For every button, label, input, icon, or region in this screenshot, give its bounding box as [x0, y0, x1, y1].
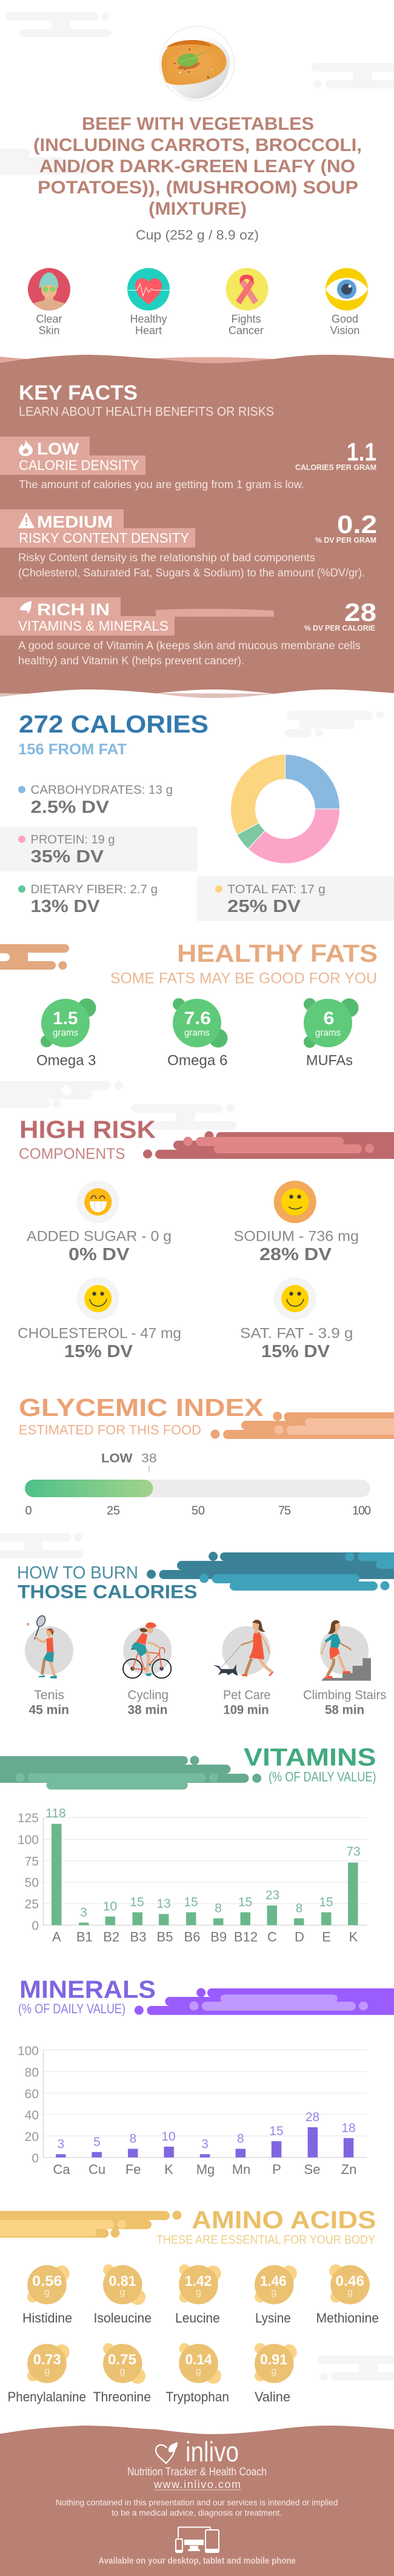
benefit label: fights cancer [229, 313, 264, 337]
label: climbing stairs: Climbing Stairs [303, 1688, 387, 1702]
fact: medium risky content density: MEDIUM [37, 512, 113, 531]
background cloud near amino acids [318, 2355, 394, 2381]
amino badge: phenylalanine: Phenylalanine [7, 2389, 86, 2404]
amino badge: phenylalanine: g [44, 2366, 50, 2376]
background cloud top left [6, 12, 112, 37]
fact: medium risky content density [0, 509, 377, 579]
fact: low calorie density: The amount of calories you are getting from 1 gram is low. [19, 478, 304, 491]
icon: warning triangle [18, 512, 35, 528]
benefit label: fights cancer: Cancer [229, 324, 264, 337]
section: amino acids [0, 2206, 379, 2404]
amino badge: leucine: Leucine [175, 2310, 220, 2326]
background cloud above burn section [0, 1533, 84, 1558]
fact: rich in vitamins and minerals: RICH IN [37, 600, 110, 619]
bar chart: minerals: 18 [341, 2121, 356, 2135]
icon: flame [19, 440, 33, 456]
logo: inlivo: inlivo [185, 2436, 239, 2467]
bar chart: vitamins: 10 [103, 1899, 117, 1914]
subheading: key facts: LEARN ABOUT HEALTH BENEFITS OR RISKS [19, 405, 274, 418]
amino badge: histidine [22, 2265, 72, 2326]
gauge scale: 0 [25, 1504, 32, 1517]
bar chart: vitamins: 25 [25, 1897, 39, 1911]
badge: omega 3 [36, 998, 96, 1068]
bar chart: minerals: Ca [53, 2162, 70, 2177]
amino badge: valine: g [272, 2366, 276, 2376]
risk item: sodium: 28% DV [259, 1245, 332, 1264]
fact: rich in vitamins and minerals: % DV PER CALORIE [304, 623, 375, 632]
bar chart: minerals: 5 [93, 2135, 101, 2149]
decorative band: high risk [143, 1132, 394, 1159]
bar chart: vitamins: B3 [130, 1930, 146, 1944]
heading: calories: 272 CALORIES [19, 710, 209, 738]
subheading: components: COMPONENTS [19, 1145, 125, 1162]
bar chart: minerals [18, 2044, 367, 2177]
section: vitamins [0, 1743, 376, 1944]
label: pet care [223, 1688, 270, 1717]
badge: omega 3: grams [53, 1028, 78, 1038]
title: BEEF WITH VEGETABLES [82, 114, 314, 134]
disclaimer [56, 2497, 338, 2518]
risk item: added sugar: ADDED SUGAR - 0 g [27, 1229, 172, 1244]
bar chart: vitamins: 8 [296, 1902, 302, 1915]
heading: how to burn: HOW TO BURN [17, 1563, 138, 1583]
legend: total fat [197, 876, 394, 921]
bar chart: minerals: 40 [25, 2108, 39, 2122]
availability note: Available on your desktop, tablet and mobile phone [98, 2557, 296, 2566]
bar chart: vitamins: 23 [265, 1888, 279, 1902]
fact: medium risky content density: (Cholesterol, Saturated Fat, Sugars & Sodium) to the amount (%DV/gr). [18, 566, 365, 579]
fact: low calorie density: LOW [37, 439, 79, 458]
benefit label: clear skin: Skin [38, 324, 60, 337]
legend: carbohydrates: CARBOHYDRATES: 13 g [30, 783, 173, 797]
gauge marker: low 38: LOW [101, 1452, 133, 1465]
gauge marker: low 38 [101, 1452, 157, 1472]
risk item: added sugar: 0% DV [68, 1245, 130, 1264]
amino badge: methionine [316, 2264, 379, 2326]
amino badge: tryptophan: 0.14 [185, 2352, 212, 2368]
fact: rich in vitamins and minerals [0, 597, 376, 667]
bar chart: minerals: Mn [232, 2162, 250, 2177]
risk item: saturated fat: 15% DV [261, 1342, 330, 1361]
benefit label: healthy heart [130, 313, 167, 337]
fact: medium risky content density: Risky Content density is the relationship of bad components [18, 552, 315, 564]
benefit label: good vision: Good [332, 313, 358, 325]
amino badge: lysine: g [272, 2287, 276, 2298]
bar chart: vitamins: B2 [103, 1930, 119, 1944]
bar chart: vitamins: 0 [32, 1919, 39, 1933]
bar chart: vitamins: K [349, 1930, 358, 1944]
bar chart: vitamins: B1 [76, 1930, 93, 1944]
amino badge: valine: Valine [255, 2389, 290, 2404]
activity: climbing stairs [320, 1620, 371, 1681]
amino badge: threonine [93, 2343, 151, 2404]
amino badge: phenylalanine [7, 2344, 86, 2404]
panel: footer [0, 608, 394, 2576]
risk item: saturated fat [240, 1277, 353, 1361]
heading: those calories: THOSE CALORIES [18, 1580, 198, 1602]
bar chart: vitamins: C [267, 1930, 277, 1944]
benefit label: good vision [330, 313, 359, 337]
benefit label: healthy heart: Heart [135, 324, 162, 337]
heading: healthy fats: HEALTHY FATS [177, 939, 378, 967]
badge: mufas: 6 [324, 1008, 335, 1028]
heading: minerals: MINERALS [19, 1976, 156, 2004]
fact: low calorie density: 1.1 [347, 438, 376, 466]
tagline: Nutrition Tracker & Health Coach [127, 2465, 267, 2478]
background cloud near calories [285, 711, 384, 737]
amino badge: histidine: Histidine [22, 2310, 72, 2326]
heading: glycemic index: GLYCEMIC INDEX [19, 1394, 263, 1421]
bar chart: vitamins: 73 [346, 1845, 361, 1859]
risk item: cholesterol: 15% DV [64, 1342, 133, 1361]
bar chart: vitamins: 8 [215, 1902, 222, 1915]
amino badge: tryptophan: g [196, 2366, 201, 2376]
website link: www.inlivo.com [153, 2478, 241, 2490]
disclaimer: to be a medical advice, diagnosis or treatment. [112, 2508, 282, 2518]
amino badge: phenylalanine: 0.73 [33, 2352, 61, 2368]
gauge scale: 25 [107, 1504, 120, 1517]
legend: carbohydrates: 2.5% DV [30, 798, 110, 817]
amino badge: leucine: 1.42 [185, 2273, 212, 2290]
background clouds above high risk [0, 1081, 236, 1130]
background cloud top right [312, 63, 394, 89]
food photo: bowl of soup [160, 26, 234, 101]
amino badge: lysine: Lysine [255, 2310, 291, 2326]
bar chart: minerals: K [164, 2162, 173, 2177]
badge: omega 6: grams [184, 1028, 210, 1038]
subheading: amino acids: THESE ARE ESSENTIAL FOR YOUR BODY [156, 2233, 375, 2247]
risk item: saturated fat: SAT. FAT - 3.9 g [240, 1326, 353, 1341]
panel: key facts [0, 355, 394, 698]
bar chart: minerals: 28 [306, 2110, 319, 2124]
label: tennis: Tenis [34, 1688, 64, 1702]
label: tennis: 45 min [29, 1703, 69, 1717]
disclaimer: Nothing contained in this presentation and our services is intended or implied [56, 2497, 338, 2507]
fact: rich in vitamins and minerals: 28 [344, 598, 376, 626]
activity: pet care [213, 1620, 273, 1676]
heading: vitamins: VITAMINS [244, 1743, 376, 1771]
bar chart: vitamins: 125 [18, 1811, 39, 1825]
section: minerals [18, 1976, 394, 2177]
legend: protein: PROTEIN: 19 g [30, 833, 115, 847]
fact: low calorie density [0, 437, 376, 491]
amino badge: leucine [175, 2264, 221, 2326]
amino badge: isoleucine: g [120, 2287, 125, 2298]
bar chart: minerals: 10 [161, 2130, 176, 2144]
label: climbing stairs: 58 min [325, 1703, 364, 1717]
donut chart [230, 754, 339, 864]
benefit label: good vision: Vision [330, 324, 359, 337]
amino badge: lysine [255, 2265, 297, 2326]
bar chart: vitamins [18, 1806, 367, 1944]
bar chart: minerals: 100 [18, 2044, 39, 2058]
fact: low calorie density: CALORIES PER GRAM [295, 463, 376, 472]
serving size: Cup (252 g / 8.9 oz) [136, 227, 259, 243]
title: (INCLUDING CARROTS, BROCCOLI, [33, 135, 362, 155]
bar chart: vitamins: B6 [184, 1930, 200, 1944]
bar chart: minerals: 60 [25, 2087, 39, 2101]
gauge scale [25, 1504, 371, 1517]
badge: omega 3: 1.5 [53, 1008, 78, 1028]
amino badge: threonine: g [120, 2366, 125, 2376]
fact: low calorie density: CALORIE DENSITY [19, 457, 139, 473]
badge: mufas: grams [315, 1028, 341, 1038]
amino badge: methionine: g [347, 2287, 353, 2298]
heading: key facts: KEY FACTS [19, 381, 138, 404]
fact: rich in vitamins and minerals: healthy) and Vitamin K (helps prevent cancer). [18, 655, 244, 667]
amino badge: isoleucine: Isoleucine [93, 2310, 152, 2326]
amino badge: threonine: 0.75 [108, 2352, 136, 2368]
legend: total fat: 25% DV [227, 897, 301, 916]
bar chart: vitamins: 118 [45, 1806, 66, 1820]
amino badge: tryptophan [166, 2343, 229, 2404]
logo: inlivo [156, 2436, 239, 2467]
amino badge: lysine: 1.46 [260, 2273, 287, 2290]
subheading: minerals: (% OF DAILY VALUE) [18, 2001, 125, 2016]
title: POTATOES)), (MUSHROOM) SOUP [38, 178, 358, 198]
bar chart: vitamins: B9 [210, 1930, 227, 1944]
label: cycling: Cycling [127, 1688, 169, 1702]
legend: dietary fiber: 13% DV [30, 897, 100, 916]
legend: protein: 35% DV [30, 847, 104, 867]
gauge scale: 75 [278, 1504, 291, 1517]
bar chart: minerals: 15 [269, 2124, 284, 2138]
subheading: healthy fats: SOME FATS MAY BE GOOD FOR YOU [110, 970, 377, 987]
amino badge: histidine: 0.56 [32, 2273, 62, 2290]
decorative band: amino acids [0, 2211, 182, 2238]
bar chart: vitamins: A [52, 1930, 61, 1944]
amino badge: methionine: 0.46 [336, 2273, 364, 2290]
fact: medium risky content density: RISKY CONTENT DENSITY [19, 530, 189, 546]
label: tennis [29, 1688, 69, 1717]
risk item: sodium [234, 1181, 359, 1264]
bar chart: minerals: 8 [129, 2132, 136, 2145]
bar chart: minerals: Fe [125, 2162, 141, 2177]
bar chart: minerals: Cu [88, 2162, 105, 2177]
bar chart: vitamins: 100 [18, 1833, 39, 1847]
bar chart: vitamins: 15 [319, 1896, 333, 1909]
bar chart: vitamins: E [322, 1930, 331, 1944]
amino badge: threonine: Threonine [93, 2389, 151, 2404]
benefit label: clear skin: Clear [36, 313, 62, 325]
heading: high risk: HIGH RISK [19, 1116, 156, 1144]
gauge marker: low 38: 38 [141, 1452, 157, 1465]
risk item: added sugar [27, 1181, 172, 1264]
bar chart: vitamins: 15 [130, 1896, 144, 1909]
legend: total fat: TOTAL FAT: 17 g [227, 883, 326, 896]
badge: mufas: MUFAs [306, 1053, 353, 1068]
legend: carbohydrates [18, 783, 173, 817]
badge: omega 3: Omega 3 [36, 1053, 96, 1068]
bar chart: vitamins: B5 [157, 1930, 173, 1944]
decorative band: healthy fats [0, 944, 69, 970]
bar chart: vitamins: 50 [25, 1876, 39, 1890]
heading: amino acids: AMINO ACIDS [192, 2206, 376, 2234]
legend: dietary fiber: DIETARY FIBER: 2.7 g [30, 883, 158, 896]
benefit icon: healthy heart [127, 268, 170, 310]
bar chart: minerals: 0 [32, 2152, 39, 2165]
amino badge: histidine: g [44, 2287, 50, 2298]
badge: omega 6: Omega 6 [167, 1053, 228, 1068]
fact: rich in vitamins and minerals: VITAMINS & MINERALS [18, 618, 169, 634]
activity: tennis [25, 1614, 73, 1679]
decorative band: glycemic [211, 1412, 394, 1439]
label: pet care: 109 min [223, 1703, 269, 1717]
section: glycemic index [19, 1394, 394, 1517]
label: cycling: 38 min [127, 1703, 167, 1717]
subheading: glycemic: ESTIMATED FOR THIS FOOD [19, 1423, 201, 1437]
bar chart: vitamins: B12 [234, 1930, 258, 1944]
benefit label: healthy heart: Healthy [130, 313, 167, 325]
bar chart: vitamins: 3 [80, 1905, 87, 1920]
section: calories [0, 710, 394, 921]
benefit icon: clear skin [28, 268, 70, 312]
icon: leaf [20, 601, 32, 615]
bar chart: minerals: P [272, 2162, 281, 2177]
bar chart: vitamins: 75 [25, 1854, 39, 1869]
bar chart: vitamins: 15 [184, 1896, 198, 1909]
label: climbing stairs [303, 1688, 387, 1717]
benefit label: fights cancer: Fights [231, 313, 261, 325]
title: (MIXTURE) [149, 199, 247, 219]
title [33, 114, 362, 219]
bar chart: vitamins: 13 [156, 1897, 171, 1911]
badge: omega 6: 7.6 [184, 1008, 211, 1028]
fact: medium risky content density: % DV PER GRAM [315, 535, 376, 545]
amino badge: valine: 0.91 [260, 2352, 287, 2368]
legend: dietary fiber [18, 883, 158, 916]
bar chart: minerals: Zn [341, 2162, 356, 2177]
gauge scale: 100 [352, 1504, 371, 1517]
amino badge: isoleucine [93, 2264, 152, 2326]
amino badge: tryptophan: Tryptophan [166, 2389, 229, 2404]
fact: medium risky content density: 0.2 [337, 510, 377, 538]
bar chart: minerals: 3 [201, 2137, 209, 2152]
bar chart: minerals: Se [304, 2162, 320, 2177]
bar chart: minerals: 80 [25, 2065, 39, 2080]
amino badge: valine [255, 2343, 297, 2404]
title: AND/OR DARK-GREEN LEAFY (NO [39, 156, 355, 176]
bar chart: minerals: 8 [237, 2132, 244, 2145]
decorative band: minerals [135, 1988, 394, 2015]
section: high risk components [18, 1116, 394, 1361]
decorative band: vitamins [0, 1756, 261, 1789]
gauge scale: 50 [192, 1504, 205, 1517]
activity: cycling [123, 1622, 172, 1678]
subheading: calories from fat: 156 FROM FAT [18, 741, 127, 758]
benefit icon: fights cancer [225, 268, 268, 310]
benefit label: clear skin [36, 313, 62, 337]
section: how to burn calories [17, 1552, 394, 1717]
legend: protein [0, 827, 198, 871]
amino badge: methionine: Methionine [316, 2310, 379, 2326]
risk item: cholesterol [18, 1277, 181, 1361]
risk item: cholesterol: CHOLESTEROL - 47 mg [18, 1326, 181, 1341]
label: cycling [127, 1688, 169, 1717]
label: pet care: Pet Care [223, 1688, 270, 1702]
bar chart: minerals: Mg [196, 2162, 215, 2177]
glycemic gauge bar [25, 1480, 370, 1497]
bar chart: minerals: 20 [25, 2130, 39, 2144]
benefit icon: good vision [326, 268, 368, 310]
bar chart: vitamins: D [295, 1930, 304, 1944]
risk item: sodium: SODIUM - 736 mg [234, 1229, 359, 1244]
amino badge: isoleucine: 0.81 [109, 2273, 136, 2290]
icon: devices [176, 2527, 219, 2552]
background cloud behind title [0, 149, 90, 175]
bar chart: minerals: 3 [57, 2137, 64, 2152]
bar chart: vitamins: 15 [238, 1896, 252, 1909]
decorative band: burn [147, 1552, 394, 1591]
amino badge: leucine: g [196, 2287, 201, 2298]
fact: rich in vitamins and minerals: A good source of Vitamin A (keeps skin and mucous membrane cells [18, 639, 361, 651]
badge: mufas [304, 998, 359, 1068]
section: healthy fats [0, 939, 378, 1068]
badge: omega 6 [167, 998, 228, 1068]
